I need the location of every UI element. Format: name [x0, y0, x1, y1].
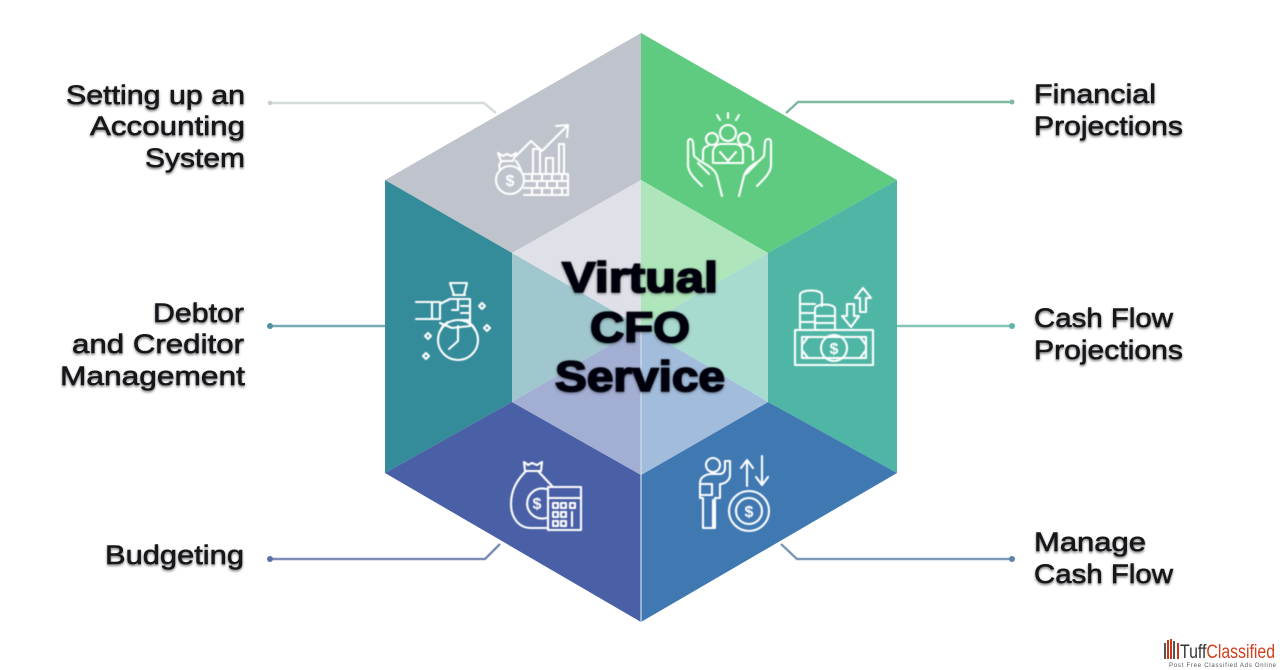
icon: money bag with growth chart: [496, 125, 568, 195]
label: setting up an accounting system: Setting up an: [66, 80, 245, 110]
icon: hands holding people: [688, 113, 771, 196]
icon: person with coin and arrows: $: [745, 504, 754, 521]
logo: tuffclassified: Post Free Classified Ads Online: [1169, 663, 1277, 669]
logo: tuffclassified: [1164, 639, 1277, 669]
label: debtor and creditor management: [60, 298, 246, 391]
connector: cash flow projections: [897, 323, 1015, 329]
icon: person with coin and arrows: [700, 456, 769, 531]
label: manage cash flow: Manage: [1034, 527, 1146, 557]
connector: debtor and creditor management: [267, 323, 385, 329]
label: cash flow projections: Projections: [1034, 335, 1183, 365]
panel: debtor and creditor management: [385, 180, 512, 473]
panel: setting up an accounting system: [385, 33, 641, 253]
label: cash flow projections: Cash Flow: [1034, 303, 1174, 333]
panel: financial projections: [641, 33, 897, 253]
panel: manage cash flow: [641, 402, 897, 622]
icon: money bag with calculator: $: [533, 496, 542, 513]
label: financial projections: Financial: [1034, 79, 1156, 109]
label: setting up an accounting system: [66, 80, 245, 173]
panel: cash flow projections: [768, 180, 897, 473]
label: financial projections: Projections: [1034, 111, 1183, 141]
connector: setting up an accounting system: [268, 101, 496, 113]
panel: budgeting: [385, 402, 641, 622]
center hexagon: [512, 180, 768, 622]
label: debtor and creditor management: and Creditor: [72, 329, 244, 359]
icon: coins, arrows and banknote: [795, 288, 873, 365]
title: virtual cfo service: Virtual: [562, 254, 718, 302]
title: virtual cfo service: CFO: [590, 304, 690, 352]
label: setting up an accounting system: System: [145, 143, 245, 173]
connector: budgeting: [267, 544, 500, 562]
label: financial projections: [1034, 79, 1183, 141]
label: manage cash flow: [1034, 527, 1174, 589]
connector: manage cash flow: [781, 544, 1015, 562]
label: manage cash flow: Cash Flow: [1034, 559, 1174, 589]
title: virtual cfo service: [555, 254, 725, 401]
icon: money bag with growth chart: $: [506, 173, 515, 190]
icon: money bag with calculator: [511, 462, 581, 530]
title: virtual cfo service: Service: [555, 353, 725, 401]
icon: hand with money bag and clock: [416, 283, 490, 360]
label: cash flow projections: [1034, 303, 1183, 365]
connector: financial projections: [786, 100, 1014, 113]
label: budgeting: Budgeting: [105, 540, 244, 570]
icon: coins, arrows and banknote: $: [830, 341, 839, 358]
label: debtor and creditor management: Debtor: [153, 298, 244, 328]
label: setting up an accounting system: Accounting: [90, 111, 245, 141]
label: debtor and creditor management: Management: [60, 361, 246, 391]
